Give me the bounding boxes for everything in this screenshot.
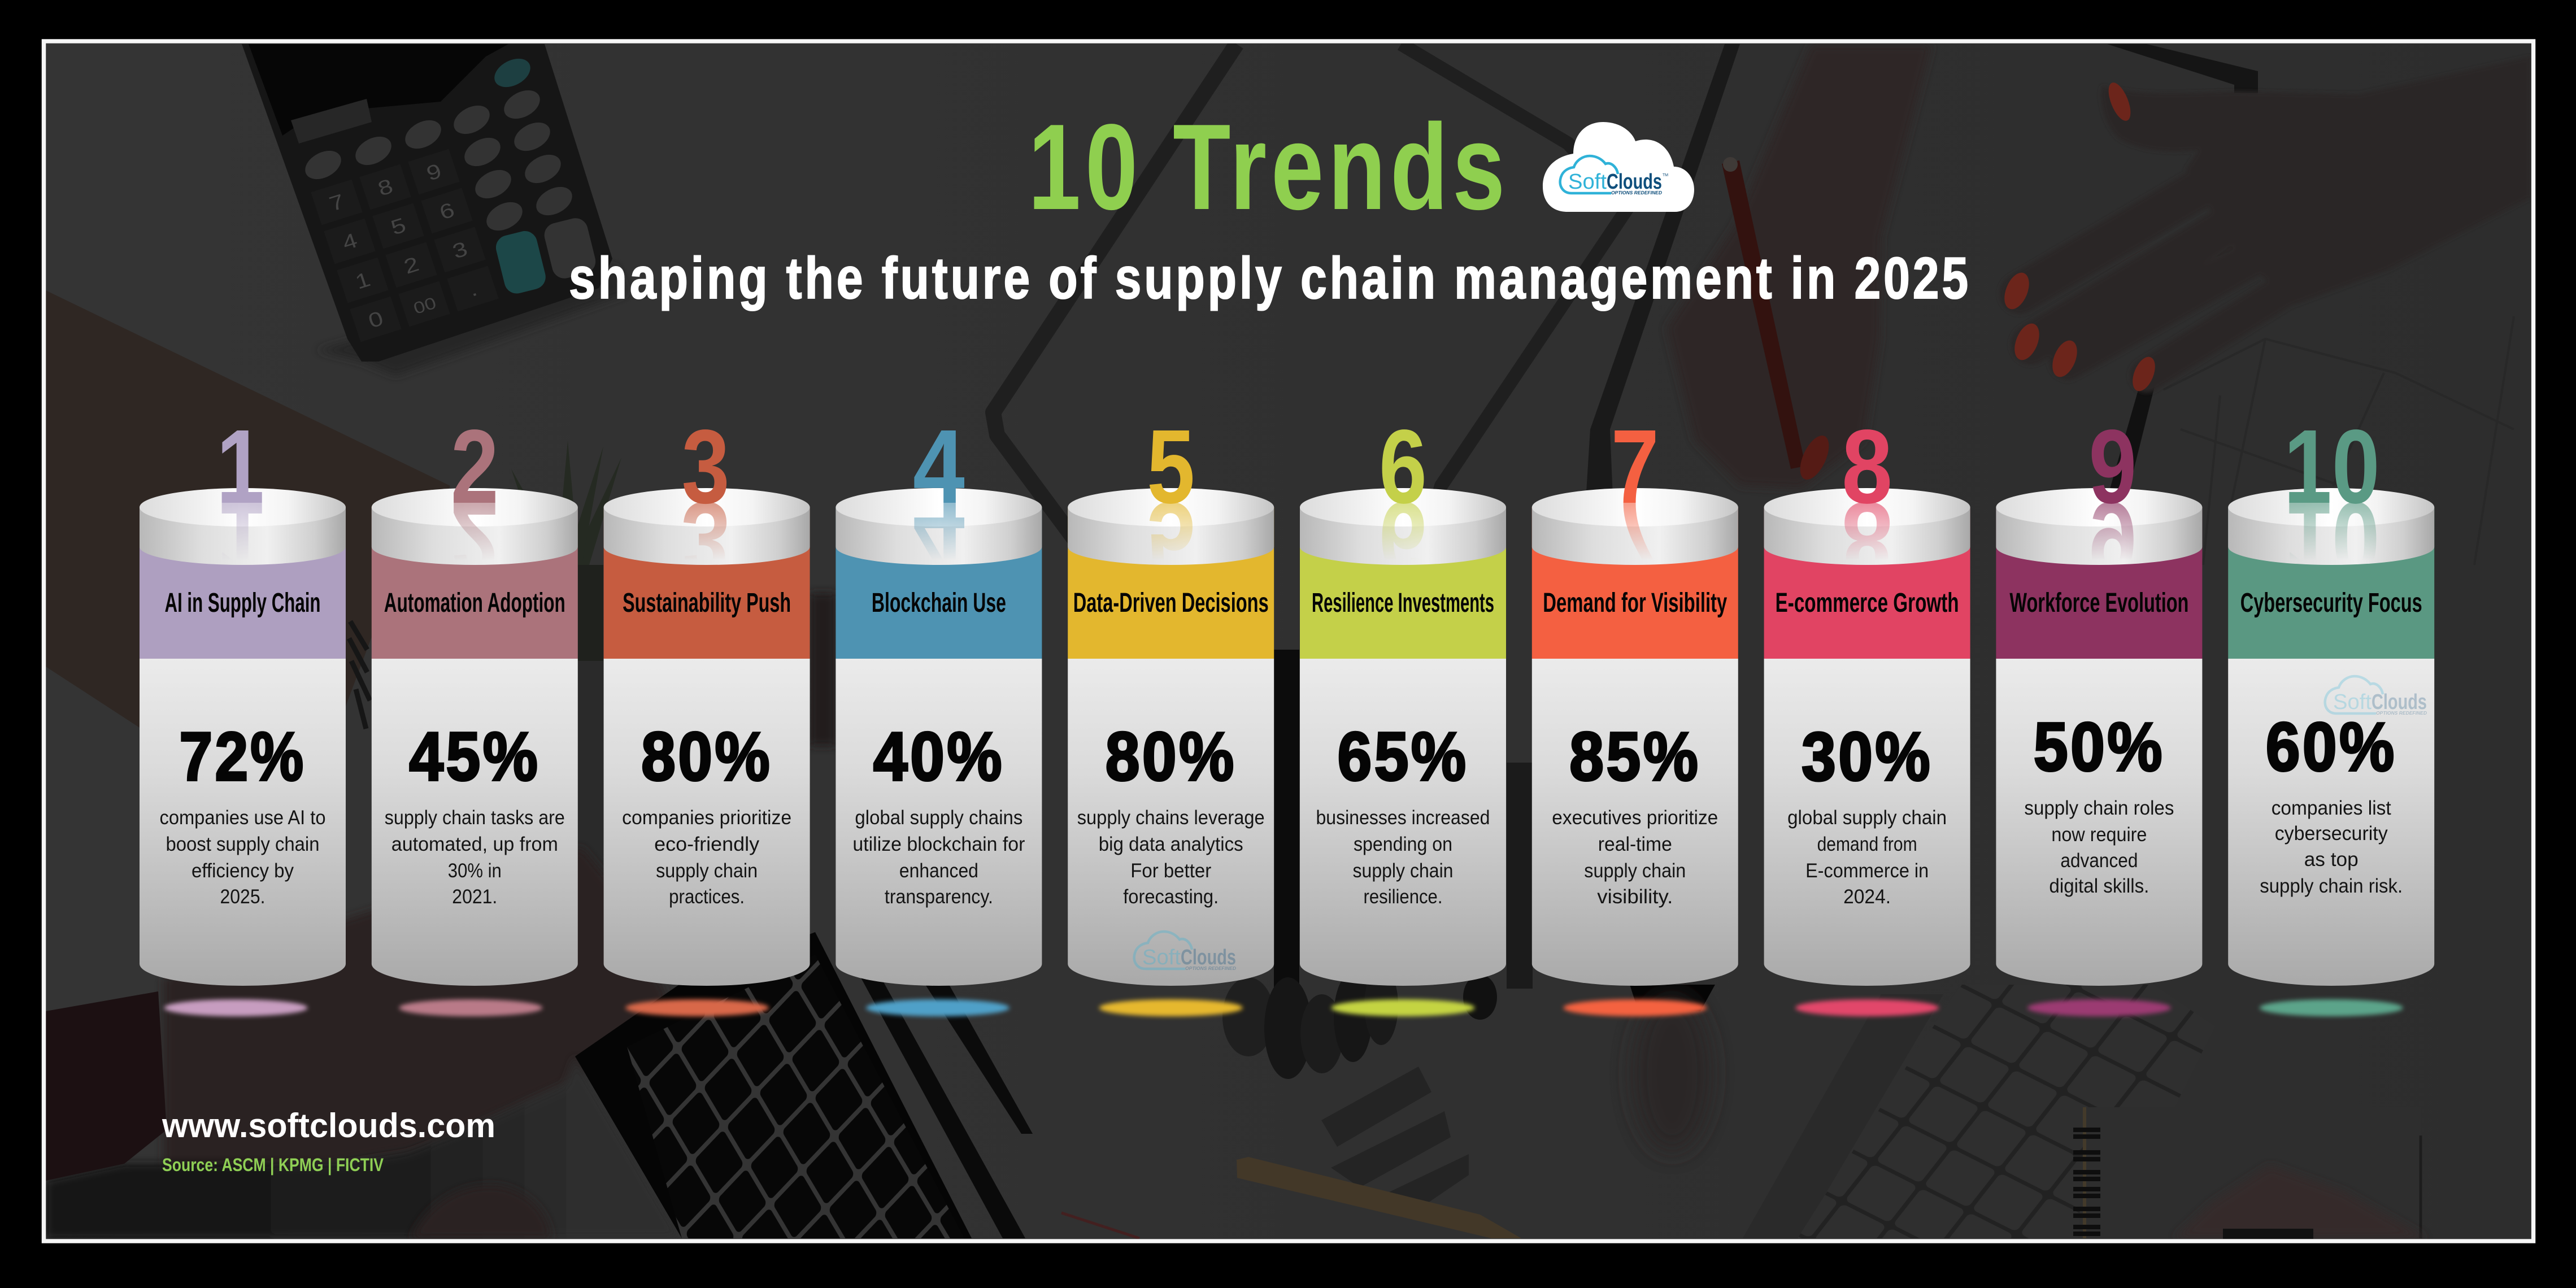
cylinder 3: Sustainability Push bbox=[604, 408, 810, 1016]
description: supply chain bbox=[1352, 860, 1453, 882]
number 3: 3 bbox=[682, 408, 730, 525]
stat: 85% bbox=[1569, 718, 1700, 795]
watermark logo: OPTIONS REDEFINED bbox=[2376, 711, 2427, 716]
description: supply chain bbox=[656, 860, 758, 882]
description: 2024. bbox=[1843, 886, 1891, 908]
description: forecasting. bbox=[1123, 886, 1219, 908]
number reflection: 3 bbox=[682, 480, 730, 597]
number reflection: 2 bbox=[451, 480, 499, 597]
left hand with pencil bbox=[1666, 44, 1932, 489]
description: transparency. bbox=[885, 886, 993, 908]
title: 10 Trends bbox=[1028, 98, 1509, 235]
striped chart bars bbox=[1321, 1067, 1469, 1205]
description: visibility. bbox=[1597, 886, 1673, 908]
number reflection: 10 bbox=[2284, 480, 2380, 597]
blueprint lines bbox=[2164, 316, 2514, 565]
central plant leaves bbox=[1222, 650, 1533, 1079]
cylinder 2: Automation Adoption bbox=[372, 408, 578, 1016]
trend label: E-commerce Growth bbox=[1776, 588, 1959, 618]
stat: 40% bbox=[873, 718, 1004, 795]
stat: 80% bbox=[1106, 718, 1237, 795]
description: cybersecurity bbox=[2275, 823, 2388, 845]
SoftClouds logo: Soft bbox=[1568, 170, 1607, 194]
cylinder 6: Resilience Investments bbox=[1300, 408, 1506, 1016]
description: executives prioritize bbox=[1552, 807, 1718, 829]
potted plant left bbox=[512, 442, 621, 863]
calculator bbox=[242, 44, 627, 376]
description bbox=[2260, 797, 2403, 897]
right hand with red nails bbox=[2000, 56, 2531, 394]
number reflection: 5 bbox=[1147, 480, 1195, 597]
description bbox=[1077, 807, 1265, 908]
description: supply chain tasks are bbox=[385, 807, 565, 829]
white keyboard bbox=[1743, 985, 2215, 1238]
SoftClouds logo bbox=[1543, 122, 1694, 212]
stat: 50% bbox=[2034, 708, 2165, 785]
description: eco-friendly bbox=[654, 833, 760, 855]
spiral notebook and hand bbox=[2073, 1107, 2427, 1240]
subtitle: shaping the future of supply chain management in 2025 bbox=[569, 246, 1971, 311]
description bbox=[159, 807, 325, 908]
number reflection: 8 bbox=[1842, 480, 1892, 597]
description: digital skills. bbox=[2049, 875, 2149, 897]
description: enhanced bbox=[899, 860, 978, 882]
stat: 72% bbox=[180, 718, 306, 795]
number 7: 7 bbox=[1611, 408, 1659, 525]
cylinder 1: AI in Supply Chain bbox=[140, 408, 346, 1016]
description bbox=[1552, 807, 1718, 908]
watermark logo: Clouds bbox=[2372, 690, 2427, 714]
scribbles between cylinders bbox=[349, 621, 370, 729]
watermark logo: OPTIONS REDEFINED bbox=[1185, 966, 1236, 971]
description: practices. bbox=[669, 886, 745, 908]
forearm and sleeve bottom left bbox=[46, 847, 682, 1239]
description: as top bbox=[2304, 848, 2359, 871]
number reflection: 7 bbox=[1611, 480, 1659, 597]
stat: 45% bbox=[409, 718, 540, 795]
coffee cup bbox=[1630, 985, 1715, 1152]
trend label: Workforce Evolution bbox=[2009, 588, 2188, 618]
description: now require bbox=[2051, 824, 2147, 846]
description: supply chain risk. bbox=[2260, 875, 2403, 897]
description: global supply chains bbox=[855, 807, 1022, 829]
number 4: 4 bbox=[913, 408, 965, 525]
SoftClouds logo: OPTIONS REDEFINED bbox=[1611, 190, 1662, 195]
second tablet edge bbox=[1586, 44, 1740, 490]
number reflection: 9 bbox=[2088, 480, 2136, 597]
watermark logo bbox=[2325, 676, 2427, 716]
number 5: 5 bbox=[1147, 408, 1195, 525]
description: supply chain roles bbox=[2024, 797, 2174, 819]
description: companies prioritize bbox=[622, 807, 791, 829]
cylinder 9: Workforce Evolution bbox=[1996, 408, 2202, 1016]
trend label: Cybersecurity Focus bbox=[2240, 588, 2422, 618]
cylinder 8: E-commerce Growth bbox=[1764, 408, 1970, 1016]
number reflection: 1 bbox=[216, 480, 264, 597]
cylinder 10: Cybersecurity Focus bbox=[2228, 408, 2434, 1016]
number 2: 2 bbox=[451, 408, 499, 525]
website url: www.softclouds.com bbox=[162, 1107, 495, 1145]
cylinder 4: Blockchain Use bbox=[836, 408, 1042, 1016]
stat: 65% bbox=[1338, 718, 1469, 795]
trend label: Sustainability Push bbox=[623, 588, 791, 618]
watermark logo bbox=[1134, 932, 1236, 971]
description: 2025. bbox=[220, 886, 266, 908]
description: automated, up from bbox=[391, 833, 558, 855]
description: spending on bbox=[1354, 833, 1452, 855]
laptop keyboard bbox=[575, 932, 1033, 1238]
trend label: Demand for Visibility bbox=[1543, 588, 1728, 618]
number reflection: 4 bbox=[913, 480, 965, 597]
cylinder 5: Data-Driven Decisions bbox=[1068, 408, 1274, 1016]
number 1: 1 bbox=[216, 408, 264, 525]
trend label: Automation Adoption bbox=[384, 588, 565, 618]
description: businesses increased bbox=[1316, 807, 1490, 829]
description: 30% in bbox=[448, 860, 502, 882]
stat: 80% bbox=[641, 718, 772, 795]
description: E-commerce in bbox=[1805, 860, 1929, 882]
description bbox=[385, 807, 565, 908]
stat: 30% bbox=[1802, 718, 1933, 795]
number reflection: 6 bbox=[1379, 480, 1427, 597]
trend label: Data-Driven Decisions bbox=[1073, 588, 1269, 618]
cylinder 7: Demand for Visibility bbox=[1532, 408, 1738, 1016]
description: global supply chain bbox=[1787, 807, 1947, 829]
description: advanced bbox=[2060, 850, 2138, 872]
watermark logo: Soft bbox=[2333, 690, 2372, 714]
description: For better bbox=[1130, 860, 1212, 882]
trend label: Resilience Investments bbox=[1312, 588, 1494, 618]
wooden desk corner bbox=[46, 290, 450, 728]
description bbox=[2024, 797, 2174, 897]
number 9: 9 bbox=[2088, 408, 2136, 525]
number 8: 8 bbox=[1842, 408, 1892, 525]
trend label: AI in Supply Chain bbox=[165, 588, 321, 618]
source line: Source: ASCM | KPMG | FICTIV bbox=[162, 1155, 384, 1175]
description: supply chain bbox=[1584, 860, 1686, 882]
stat: 60% bbox=[2266, 708, 2397, 785]
description: 2021. bbox=[452, 886, 497, 908]
description: boost supply chain bbox=[166, 833, 320, 855]
watermark logo: Soft bbox=[1142, 946, 1181, 969]
number 10: 10 bbox=[2284, 408, 2380, 525]
description: companies use AI to bbox=[159, 807, 325, 829]
wooden pencil and red pen bbox=[1237, 1157, 1521, 1238]
description: efficiency by bbox=[192, 860, 294, 882]
description: real-time bbox=[1598, 833, 1672, 855]
SoftClouds logo: TM bbox=[1663, 173, 1668, 177]
description: utilize blockchain for bbox=[852, 833, 1025, 855]
description bbox=[852, 807, 1025, 908]
description bbox=[1316, 807, 1490, 908]
description: demand from bbox=[1817, 833, 1917, 855]
trend label: Blockchain Use bbox=[872, 588, 1006, 618]
description bbox=[1787, 807, 1947, 908]
tablet outline bbox=[985, 43, 1633, 543]
description: big data analytics bbox=[1099, 833, 1243, 855]
description: resilience. bbox=[1364, 886, 1443, 908]
number 6: 6 bbox=[1379, 408, 1427, 525]
top right notebook corner bbox=[2107, 44, 2258, 93]
description bbox=[622, 807, 791, 908]
watermark logo: Clouds bbox=[1181, 946, 1236, 969]
description: supply chains leverage bbox=[1077, 807, 1265, 829]
SoftClouds logo: Clouds bbox=[1607, 170, 1662, 194]
description: companies list bbox=[2272, 797, 2391, 819]
